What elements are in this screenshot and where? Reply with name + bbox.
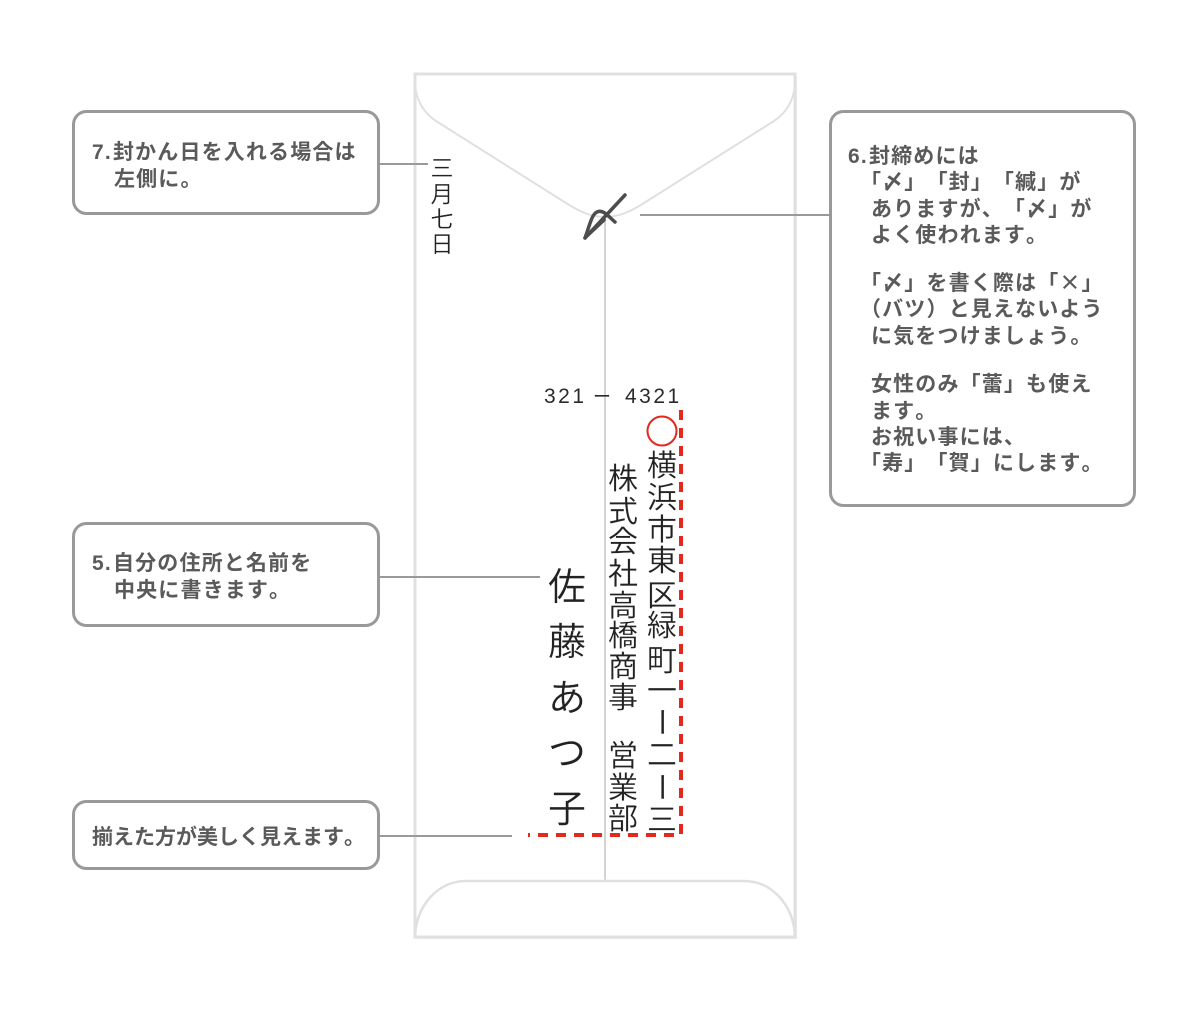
- callout 6: seal mark: 封締めには: [869, 145, 980, 168]
- sender company: 業: [608, 763, 638, 807]
- sender company: 式: [608, 487, 638, 531]
- leader line: alignment: [379, 835, 512, 837]
- sealing date: 三: [430, 149, 454, 183]
- sender company: 橋: [608, 611, 638, 655]
- red circle guide: [648, 416, 676, 446]
- sender address: 二: [647, 730, 677, 774]
- callout 6: seal mark: 「〆」を書く際は「×」: [860, 267, 1104, 297]
- callout 5: address and name: [74, 524, 378, 626]
- red dashed alignment guide: [528, 410, 681, 835]
- callout: alignment: [74, 802, 378, 868]
- callout 6: seal mark: 女性のみ「蕾」も使え: [871, 373, 1092, 396]
- sealing date: 日: [430, 225, 454, 259]
- sender address: 町: [647, 636, 677, 680]
- callout: alignment: 揃えた方が美しく見えます。: [92, 825, 365, 849]
- sender address: 市: [647, 505, 677, 549]
- callout 6: seal mark: お祝い事には、: [871, 425, 1026, 449]
- sender address: 緑: [647, 601, 677, 645]
- sender address: 東: [647, 536, 677, 580]
- sealing date: 月: [430, 175, 454, 209]
- envelope top flap: [415, 86, 795, 217]
- sender company: 会: [608, 517, 638, 561]
- sender address: 一: [647, 666, 677, 710]
- callout 6: seal mark: （バツ）と見えないよう: [860, 298, 1104, 321]
- callout 7: sealing date: 7.: [92, 141, 112, 164]
- sender company: 株: [608, 454, 638, 498]
- leader line: name: [379, 576, 540, 578]
- sender address: ー: [642, 772, 686, 802]
- callout 7: sealing date: 封かん日を入れる場合は: [113, 141, 357, 164]
- sender name: 佐: [548, 556, 586, 611]
- sender address: 横: [647, 441, 677, 485]
- postal code: 4321: [625, 385, 682, 408]
- callout 6: seal mark: に気をつけましょう。: [871, 325, 1092, 348]
- sealing date: 七: [430, 200, 454, 234]
- envelope: [415, 74, 797, 939]
- sender address: 区: [647, 571, 677, 615]
- sender company: 事: [608, 673, 638, 717]
- sender name: [548, 556, 586, 833]
- callout 6: seal mark: ありますが、「〆」が: [871, 197, 1092, 221]
- sender company: 営: [608, 731, 638, 775]
- sender address: 浜: [647, 473, 677, 517]
- callout 6: seal mark: 「〆」「封」「緘」が: [860, 170, 1082, 194]
- envelope bottom flap: [415, 881, 795, 935]
- postal code: ー: [593, 387, 611, 407]
- sender name: 藤: [548, 611, 586, 666]
- sender company: 社: [608, 549, 638, 593]
- callout 5: address and name: 5.: [92, 552, 112, 575]
- leader line: date: [379, 163, 428, 165]
- sender name: あ: [548, 667, 586, 722]
- sender company: [608, 454, 638, 838]
- sender company: 高: [608, 581, 638, 625]
- sender address: ー: [642, 707, 686, 737]
- postal code: 321: [544, 385, 587, 408]
- sender name: つ: [548, 722, 586, 777]
- seal mark: [585, 195, 625, 238]
- sender address: 三: [647, 795, 677, 839]
- sealing date: [430, 149, 454, 259]
- callout 7: sealing date: 左側に。: [114, 168, 203, 191]
- callout 6: seal mark: 「寿」「賀」にします。: [860, 452, 1104, 475]
- sender address: [642, 441, 686, 839]
- callout 5: address and name: 中央に書きます。: [114, 579, 291, 602]
- sender name: 子: [548, 778, 586, 833]
- callout 6: seal mark: よく使われます。: [871, 224, 1048, 247]
- sender company: 商: [608, 642, 638, 686]
- sender company: 部: [608, 794, 638, 838]
- callout 6: seal mark: ます。: [871, 400, 937, 423]
- callout 6: seal mark: [830, 112, 1134, 506]
- callout 6: seal mark: 6.: [848, 145, 868, 168]
- envelope centre seam: [604, 217, 606, 881]
- leader line: seal: [640, 214, 830, 216]
- callout 5: address and name: 自分の住所と名前を: [113, 552, 312, 575]
- callout 7: sealing date: [74, 112, 378, 214]
